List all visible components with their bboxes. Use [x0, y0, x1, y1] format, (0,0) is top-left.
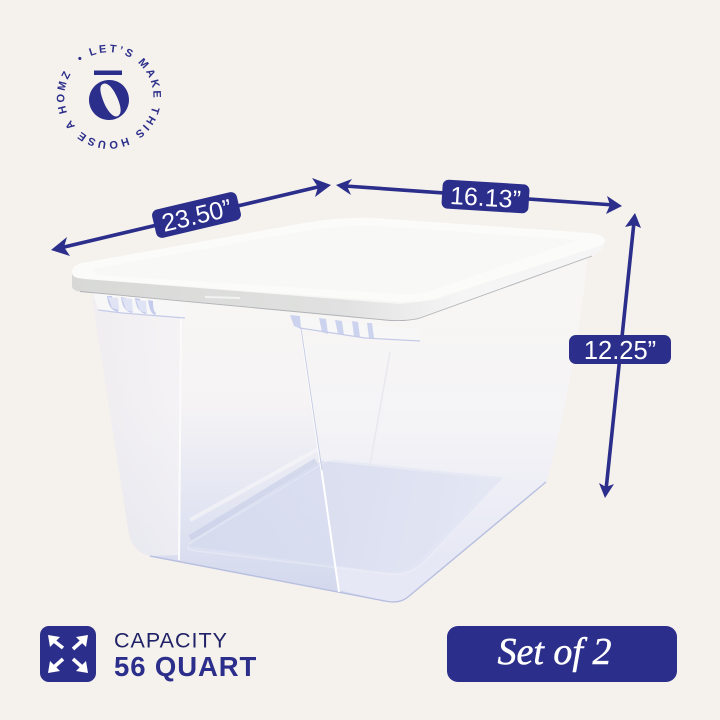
- capacity text: CAPACITY: [114, 628, 228, 652]
- tote body: [92, 258, 587, 602]
- capacity text: [114, 628, 257, 682]
- set of 2 badge: [447, 626, 677, 682]
- dimension arrow: 23.50 inches: [51, 178, 331, 256]
- lid clips right: [290, 315, 420, 341]
- logo: letter o with bar: [89, 70, 129, 120]
- circular slogan: • LET’S MAKE THIS HOUSE A HOMZ: [56, 44, 161, 149]
- label: 12.25: [569, 335, 671, 365]
- dimension arrow: 12.25 inches: [569, 213, 671, 498]
- capacity icon: [40, 626, 96, 682]
- capacity text: 56 QUART: [114, 651, 257, 682]
- lid: [72, 218, 605, 321]
- brand badge: [56, 44, 161, 149]
- label: 23.50: 23.50”: [159, 194, 234, 238]
- set of 2 badge: Set of 2: [498, 631, 611, 673]
- storage tote: [72, 218, 605, 602]
- label: 16.13: 16.13”: [449, 182, 522, 214]
- dimension arrow: 16.13 inches: [336, 179, 622, 214]
- lid clips left: [93, 292, 185, 318]
- label: 12.25: 12.25”: [584, 337, 656, 365]
